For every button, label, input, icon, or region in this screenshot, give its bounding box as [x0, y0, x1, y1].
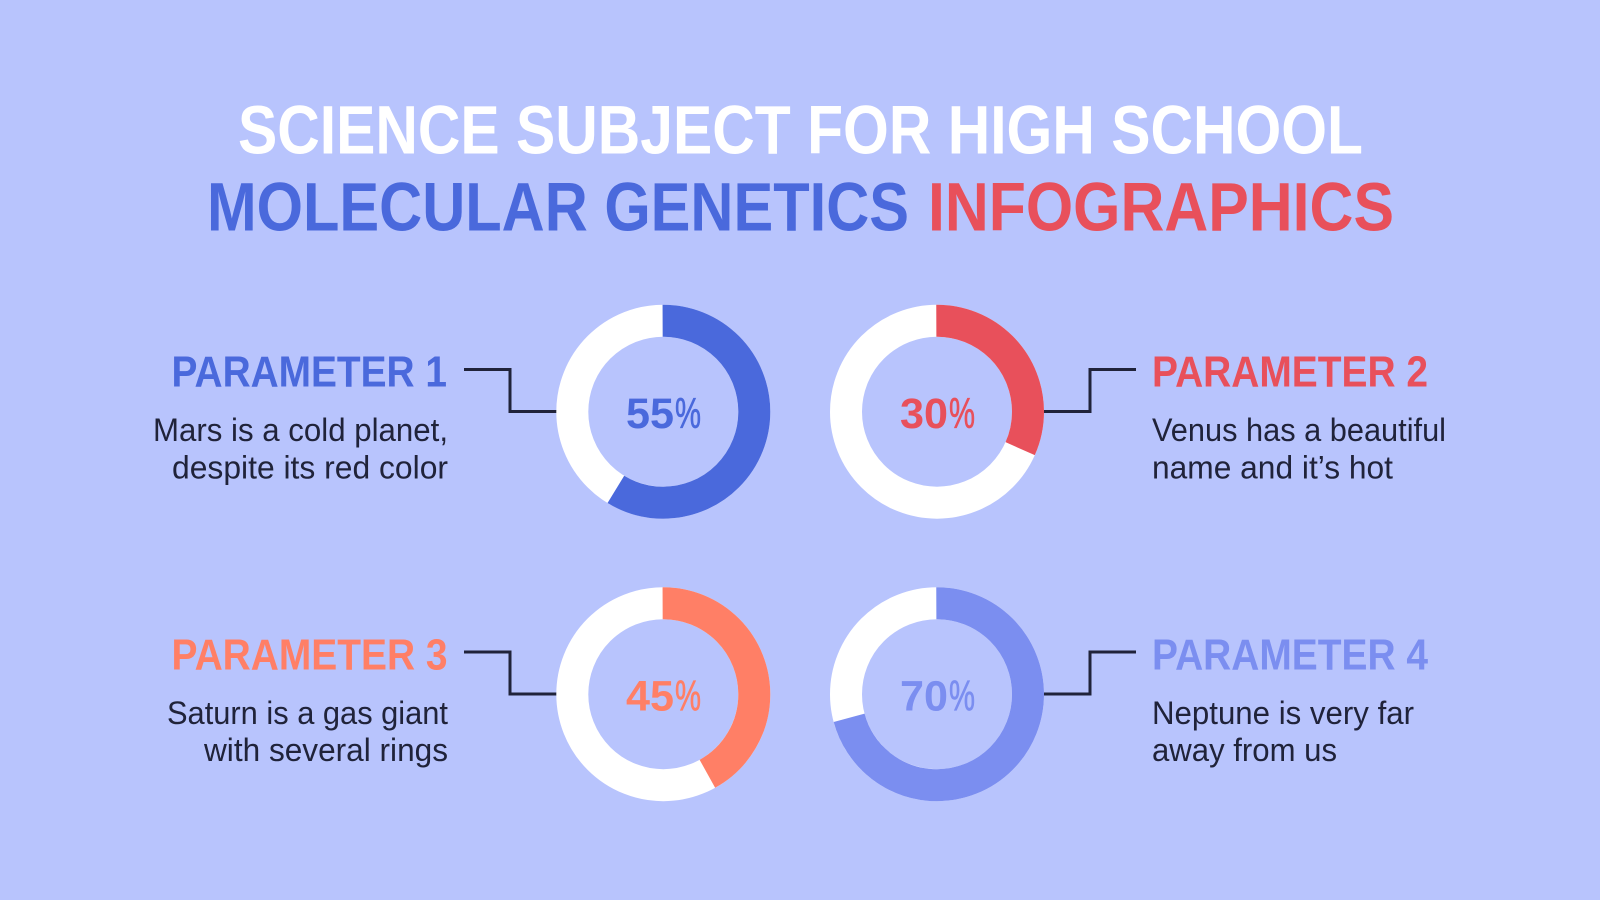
heading: parameter 1: PARAMETER 1 [172, 348, 447, 396]
connector: parameter 1 [464, 370, 557, 412]
connector: parameter 2 [1044, 370, 1136, 412]
text block: parameter 2: name and it’s hot [1152, 449, 1393, 485]
text block: parameter 1: Mars is a cold planet, [153, 412, 448, 448]
heading: parameter 4: PARAMETER 4 [1152, 632, 1428, 680]
text block: parameter 2: Venus has a beautiful [1152, 412, 1446, 448]
text block: parameter 2 [1152, 412, 1446, 485]
text block: parameter 4: Neptune is very far [1152, 695, 1414, 731]
panel: parameter 2 [846, 321, 1446, 503]
donut chart: 30% [846, 321, 1028, 503]
panel: parameter 1 [153, 321, 754, 503]
title: INFOGRAPHICS [928, 168, 1394, 246]
heading: parameter 3: PARAMETER 3 [172, 632, 448, 680]
donut chart: 45% [572, 603, 754, 785]
donut chart: 70%: % [949, 674, 975, 721]
title: MOLECULAR GENETICS [207, 168, 909, 246]
donut chart: 45%: % [675, 674, 701, 721]
donut chart: 30%: 30 [900, 391, 948, 438]
text block: parameter 4 [1152, 695, 1414, 768]
title: SCIENCE SUBJECT FOR HIGH SCHOOL [238, 92, 1363, 168]
title [207, 92, 1394, 246]
heading: parameter 2: PARAMETER 2 [1152, 348, 1428, 396]
connector: parameter 3 [464, 652, 557, 694]
donut chart: 45%: 45 [626, 674, 674, 721]
text block: parameter 1: despite its red color [172, 449, 448, 485]
panel: parameter 3 [167, 603, 754, 785]
donut chart: 55% [572, 321, 754, 503]
text block: parameter 1 [153, 412, 448, 485]
text block: parameter 3: with several rings [203, 732, 448, 768]
donut chart: 70% [846, 603, 1028, 785]
text block: parameter 3 [167, 695, 448, 768]
donut chart: 30%: % [949, 391, 975, 438]
donut chart: 55%: 55 [626, 391, 674, 438]
text block: parameter 4: away from us [1152, 732, 1337, 768]
panel: parameter 4 [846, 603, 1428, 785]
text block: parameter 3: Saturn is a gas giant [167, 695, 448, 731]
donut chart: 70%: 70 [900, 674, 948, 721]
donut chart: 55%: % [675, 391, 701, 438]
connector: parameter 4 [1044, 652, 1136, 694]
